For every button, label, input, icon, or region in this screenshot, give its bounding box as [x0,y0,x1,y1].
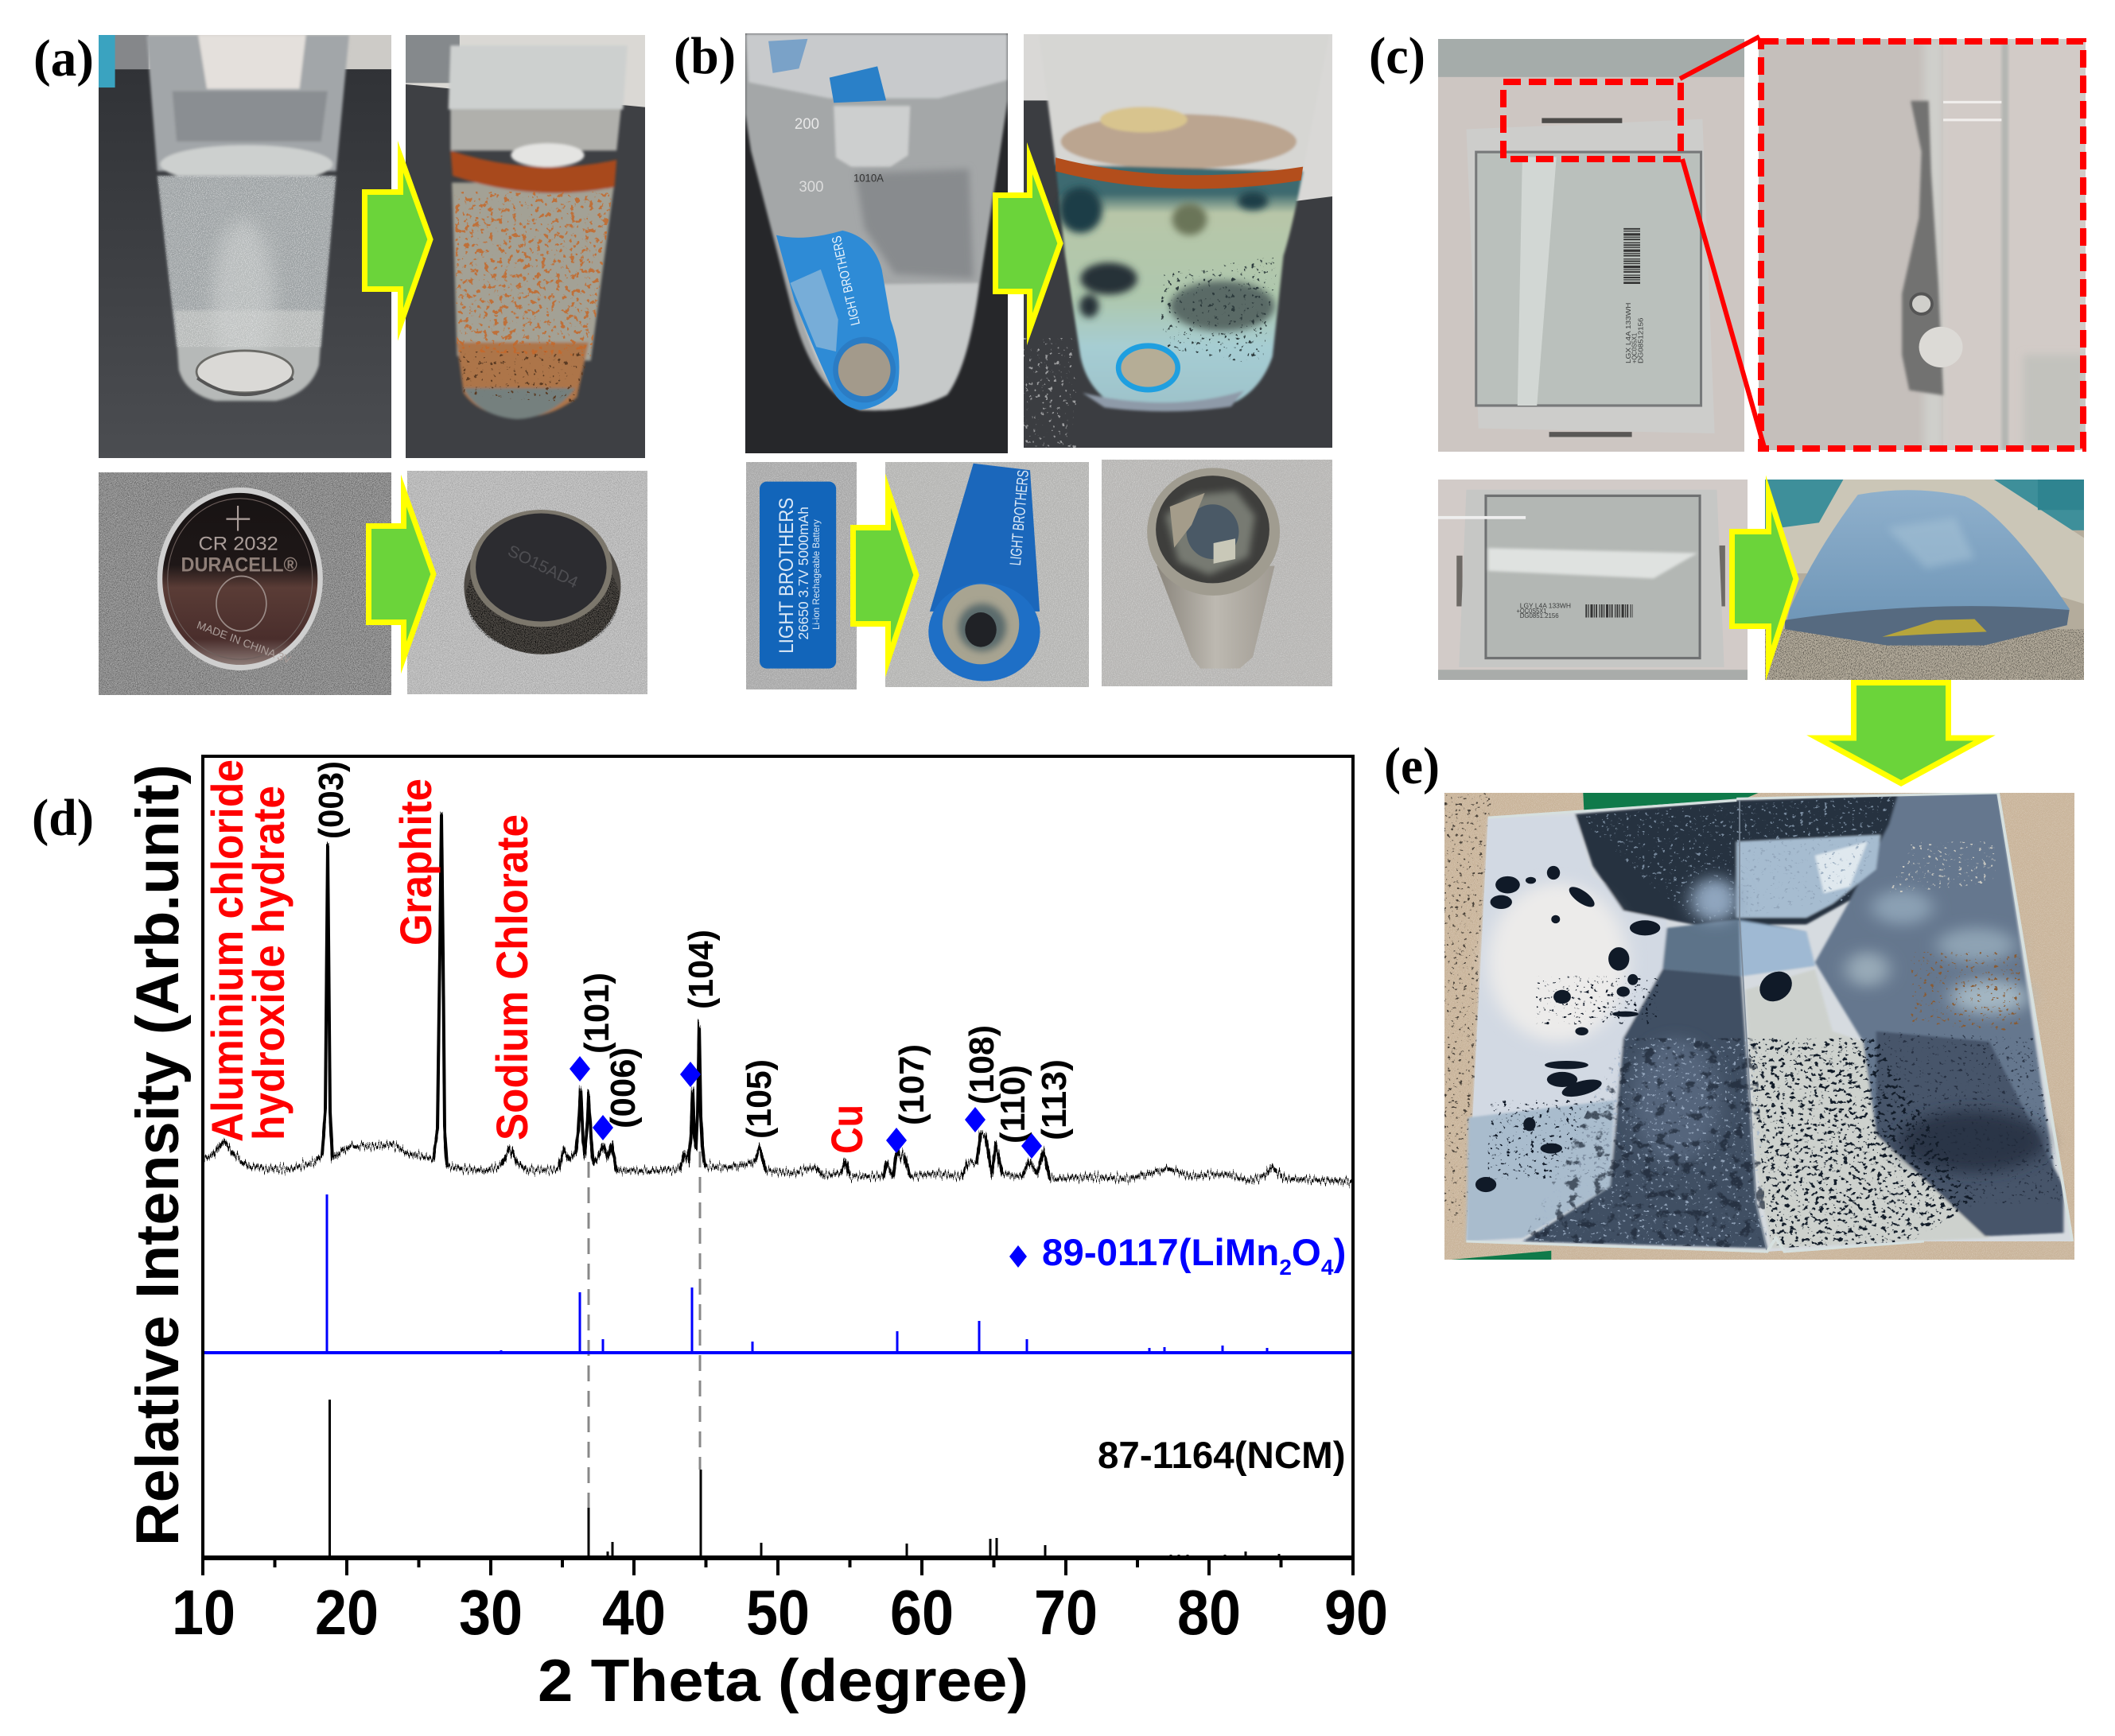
photo: opened corroded pouch cell (e) [1444,793,2074,1260]
arrow: cylindrical cell disassembly [853,491,916,660]
text: cell label: Li-ion Rechageable Battery [811,518,822,630]
text: coin cell markings: CR 2032 [198,533,278,554]
arrow: coin cell disassembly [369,491,433,658]
text: cell wrapper in beaker: LIGHT BROTHERS [829,235,863,327]
chart: XRD pattern [124,756,1388,1714]
label (e): (e) [1384,737,1440,795]
corrosion blotches [1475,866,1798,1192]
axis tick labels: 90 [1324,1577,1388,1648]
legend: LiMn2O4: 4 [1321,1255,1334,1280]
photo: corroded jar with orange precipitate [406,35,645,458]
phase labels [202,759,872,1154]
text: pouch print [1624,303,1645,363]
text: pouch print: DG0851.2156 [1520,612,1559,619]
reference lines: dashed guides [589,1152,700,1508]
miller index labels: (101) [577,973,616,1054]
text: serial marking: SO15AD4 [505,542,581,592]
phase labels: Aluminium chloride [202,759,252,1142]
text: coin cell markings: DURACELL® [181,554,297,577]
photo: blue 26650 cell [746,462,857,689]
phase labels: Cu [822,1105,872,1154]
photo: glass with coin cell in solution [99,35,391,458]
text: pouch print: LGX L4A 133WH [1624,303,1632,363]
axis tick labels: 10 [172,1577,235,1648]
miller index labels: (006) [604,1047,643,1128]
arrow: pouch cell to opened sheet [1818,682,1985,783]
phase labels: Sodium Chlorate [487,814,537,1140]
legend: LiMn2O4: 2 [1279,1255,1292,1280]
photo: swollen pouch cell [1765,480,2084,680]
axis tick labels: 50 [746,1577,810,1648]
sheet: battery electrode body [1466,793,2072,1252]
miller index labels: (107) [892,1044,931,1125]
text: beaker graduations: 1010A [853,172,884,184]
text: beaker graduations: 300 [799,179,824,196]
axis tick labels: 40 [602,1577,666,1648]
miller index labels: (104) [682,930,721,1009]
miller index labels: (110) [993,1065,1032,1144]
miller index labels: (105) [740,1059,779,1139]
axis ticks [203,1558,1353,1575]
text: pouch print: LGY L4A 133WH [1520,602,1571,609]
barcode [1619,228,1646,284]
photo: new coin cell CR2032 [99,472,391,695]
stick pattern: NCM reference [329,1400,1289,1558]
miller index labels: (003) [312,761,351,839]
legend: LiMn2O4 [1009,1232,1346,1280]
phase labels: Graphite [391,779,441,946]
text: coin cell markings: MADE IN CHINA 3V [195,619,293,666]
text: cell label: 26650 3.7V 5000mAh [795,507,811,640]
miller index labels: (113) [1035,1059,1074,1140]
photo: pouch cell with damaged tab [1438,39,1744,452]
photo: corroded coin cell [407,471,647,694]
legend: LiMn2O4: ) [1333,1232,1346,1274]
miller index labels: (108) [962,1025,1001,1105]
arrow: cylindrical cell solution [996,158,1060,329]
axis tick labels [172,1577,1388,1648]
label (b): (b) [674,27,736,85]
axis tick labels: 60 [890,1577,954,1648]
photo: unwrapped corroded cell [1102,460,1332,686]
label (c): (c) [1369,27,1425,85]
photo: zoomed tab damage [1759,39,2086,450]
axis tick labels: 30 [459,1577,523,1648]
arrow: pouch cell solution [1732,493,1796,663]
callout: dashed zoom box and connector lines [1503,37,2083,450]
text: pouch print: DG08512156 [1637,318,1645,363]
photo: flat pouch cell [1438,480,1748,680]
text: cell label: LIGHT BROTHERS [776,498,798,654]
curve: measured XRD pattern [203,814,1352,1182]
label (d): (d) [32,789,94,847]
axis tick labels: 20 [315,1577,379,1648]
photo: corroded blue cell end [885,462,1089,687]
phase labels: hydroxide hydrate [243,786,294,1140]
text: beaker graduations: 200 [795,116,819,133]
axes frame [203,756,1353,1558]
label (a): (a) [33,29,94,87]
barcode [1585,600,1633,621]
x axis title: 2 Theta (degree) [538,1647,1028,1714]
legend: LiMn2O4: 89-0117(LiMn [1042,1232,1279,1274]
text: pouch print: +QC0S5X1 [1631,333,1639,363]
axis tick labels: 70 [1034,1577,1098,1648]
text: beaker graduations [795,116,884,196]
text: pouch print [1516,602,1571,619]
axis tick labels: 80 [1177,1577,1241,1648]
miller index labels [312,761,1074,1144]
photo: corroded 26650 cell in beaker [1024,34,1332,448]
y axis title: Relative Intensity (Arb.unit) [124,764,192,1546]
photo: 26650 cell in beaker [745,33,1008,453]
legend: LiMn2O4: O [1292,1232,1321,1274]
stick pattern: LiMn2O4 reference [203,1194,1353,1353]
text: coin cell markings [181,506,297,666]
arrow: coin cell solution [364,157,430,324]
text: cell label [776,498,822,654]
diamond markers [570,1056,1042,1159]
text: pouch print: +QC0S5X1 [1516,608,1547,615]
legend: NCM: 87-1164(NCM) [1098,1435,1346,1477]
